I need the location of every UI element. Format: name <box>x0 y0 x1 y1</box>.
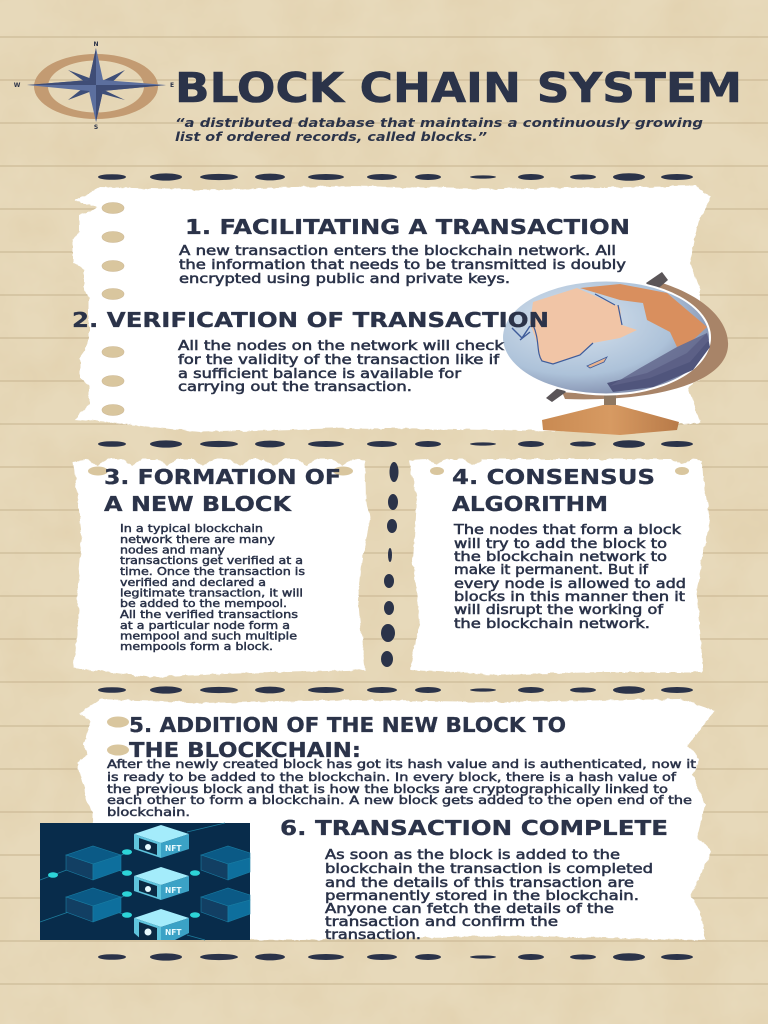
cube column: NFT blocks: NFT <box>165 844 182 853</box>
divider: dashes middle <box>98 440 693 448</box>
text: step 6 body: blockchain the transaction is completed <box>325 862 653 877</box>
text: step 6 body: and the details of this transaction are <box>325 876 634 891</box>
heading: step 3 <box>104 465 341 516</box>
icon: compass rose: E <box>170 82 174 89</box>
subtitle quote <box>175 115 703 144</box>
text: step 5 body: After the newly created block has got its hash value and is authenticated, now it <box>107 757 697 771</box>
text: step 4 body: every node is allowed to add <box>454 577 686 592</box>
text: step 3 body: network there are many <box>120 535 275 546</box>
text: step 4 body: The nodes that form a block <box>453 523 682 538</box>
cube column: NFT blocks: NFT <box>165 886 182 895</box>
subtitle quote: list of ordered records, called blocks.” <box>175 129 487 144</box>
illustration: globe <box>501 272 728 435</box>
heading: step 4 <box>452 465 655 516</box>
text: step 3 body: verified and declared a <box>120 578 266 589</box>
text: step 4 body: make it permanent. But if <box>454 563 648 578</box>
icon: compass rose <box>14 41 174 131</box>
text: step 6 body: transaction and confirm the <box>325 915 558 930</box>
title: BLOCK CHAIN SYSTEM <box>175 64 742 112</box>
text: step 4 body: blocks in this manner then it <box>454 590 685 605</box>
heading: step 4: ALGORITHM <box>452 492 608 516</box>
text: step 5 body: is ready to be added to the blockchain. In every block, there is a hash value of <box>107 770 677 784</box>
text: step 3 body: be added to the mempool. <box>120 599 287 610</box>
text: step 3 body: In a typical blockchain <box>120 524 263 535</box>
text: step 4 body: the blockchain network to <box>454 550 667 565</box>
icon: compass rose: W <box>14 82 21 89</box>
text: step 4 body: will try to add the block to <box>454 537 667 552</box>
text: step 5 body: blockchain. <box>107 805 190 819</box>
text: step 6 body <box>325 848 653 943</box>
heading: step 3: 3. FORMATION OF <box>104 465 341 489</box>
text: step 3 body: mempools form a block. <box>120 642 273 653</box>
icon: compass rose: S <box>94 124 98 131</box>
text: step 3 body: at a particular node form a <box>120 621 290 632</box>
text: step 1 body <box>179 244 626 287</box>
divider: vertical dashes <box>381 462 398 667</box>
icon: compass rose: N <box>93 41 99 48</box>
text: step 5 body <box>107 757 697 819</box>
text: step 6 body: transaction. <box>325 928 421 943</box>
text: step 6 body: As soon as the block is added to the <box>325 848 620 863</box>
text: step 4 body: the blockchain network. <box>454 617 650 632</box>
text: step 2 body: a sufficient balance is available for <box>178 367 462 382</box>
heading: step 5: THE BLOCKCHAIN: <box>129 738 361 762</box>
text: step 1 body: the information that needs to be transmitted is doubly <box>179 258 626 273</box>
heading: step 6: 6. TRANSACTION COMPLETE <box>280 816 668 840</box>
subtitle quote: “a distributed database that maintains a continuously growing <box>175 115 703 130</box>
text: step 3 body: time. Once the transaction is <box>120 567 305 578</box>
heading: step 3: A NEW BLOCK <box>104 492 293 516</box>
text: step 4 body <box>453 523 686 632</box>
text: step 2 body: carrying out the transaction. <box>178 380 412 395</box>
text: step 3 body: nodes and many <box>120 546 225 556</box>
text: step 1 body: encrypted using public and private keys. <box>179 272 510 287</box>
text: step 6 body: Anyone can fetch the details of the <box>325 902 614 917</box>
divider: dashes lower <box>98 686 693 694</box>
text: step 3 body: transactions get verified at a <box>120 556 303 567</box>
heading: step 4: 4. CONSENSUS <box>452 465 655 489</box>
cube column: NFT blocks <box>134 825 189 940</box>
heading: step 5: 5. ADDITION OF THE NEW BLOCK TO <box>129 713 566 737</box>
text: step 3 body: legitimate transaction, it will <box>120 588 303 600</box>
heading: step 2: 2. VERIFICATION OF TRANSACTION <box>72 308 549 332</box>
text: step 5 body: the previous block and that is how the blocks are cryptographically linked to <box>107 782 668 796</box>
cube row: dark blocks <box>66 846 250 922</box>
panel: step 3 paper <box>73 459 370 677</box>
text: step 1 body: A new transaction enters the blockchain network. All <box>179 244 616 259</box>
text: step 3 body: mempool and such multiple <box>120 632 297 642</box>
heading: step 5 <box>129 713 566 762</box>
panel: steps 5 and 6 paper <box>78 699 715 940</box>
text: step 2 body: for the validity of the transaction like if <box>178 353 500 368</box>
text: step 2 body <box>178 339 505 395</box>
text: step 5 body: each other to form a blockchain. A new block gets added to the open end of the <box>107 793 692 807</box>
text: step 6 body: permanently stored in the blockchain. <box>325 889 639 904</box>
divider: dashes bottom <box>98 953 693 961</box>
illustration: NFT blockchain cubes <box>40 823 250 940</box>
panel: steps 1 and 2 paper <box>73 186 711 432</box>
text: step 2 body: All the nodes on the network will check <box>178 339 505 354</box>
text: step 3 body <box>120 524 305 653</box>
panel: step 4 paper <box>409 459 710 675</box>
divider: dashes top <box>98 173 693 181</box>
text: step 4 body: will disrupt the working of <box>454 603 664 618</box>
cube column: NFT blocks: NFT <box>165 928 182 937</box>
text: step 3 body: All the verified transactions <box>120 610 298 621</box>
heading: step 1: 1. FACILITATING A TRANSACTION <box>185 215 630 239</box>
